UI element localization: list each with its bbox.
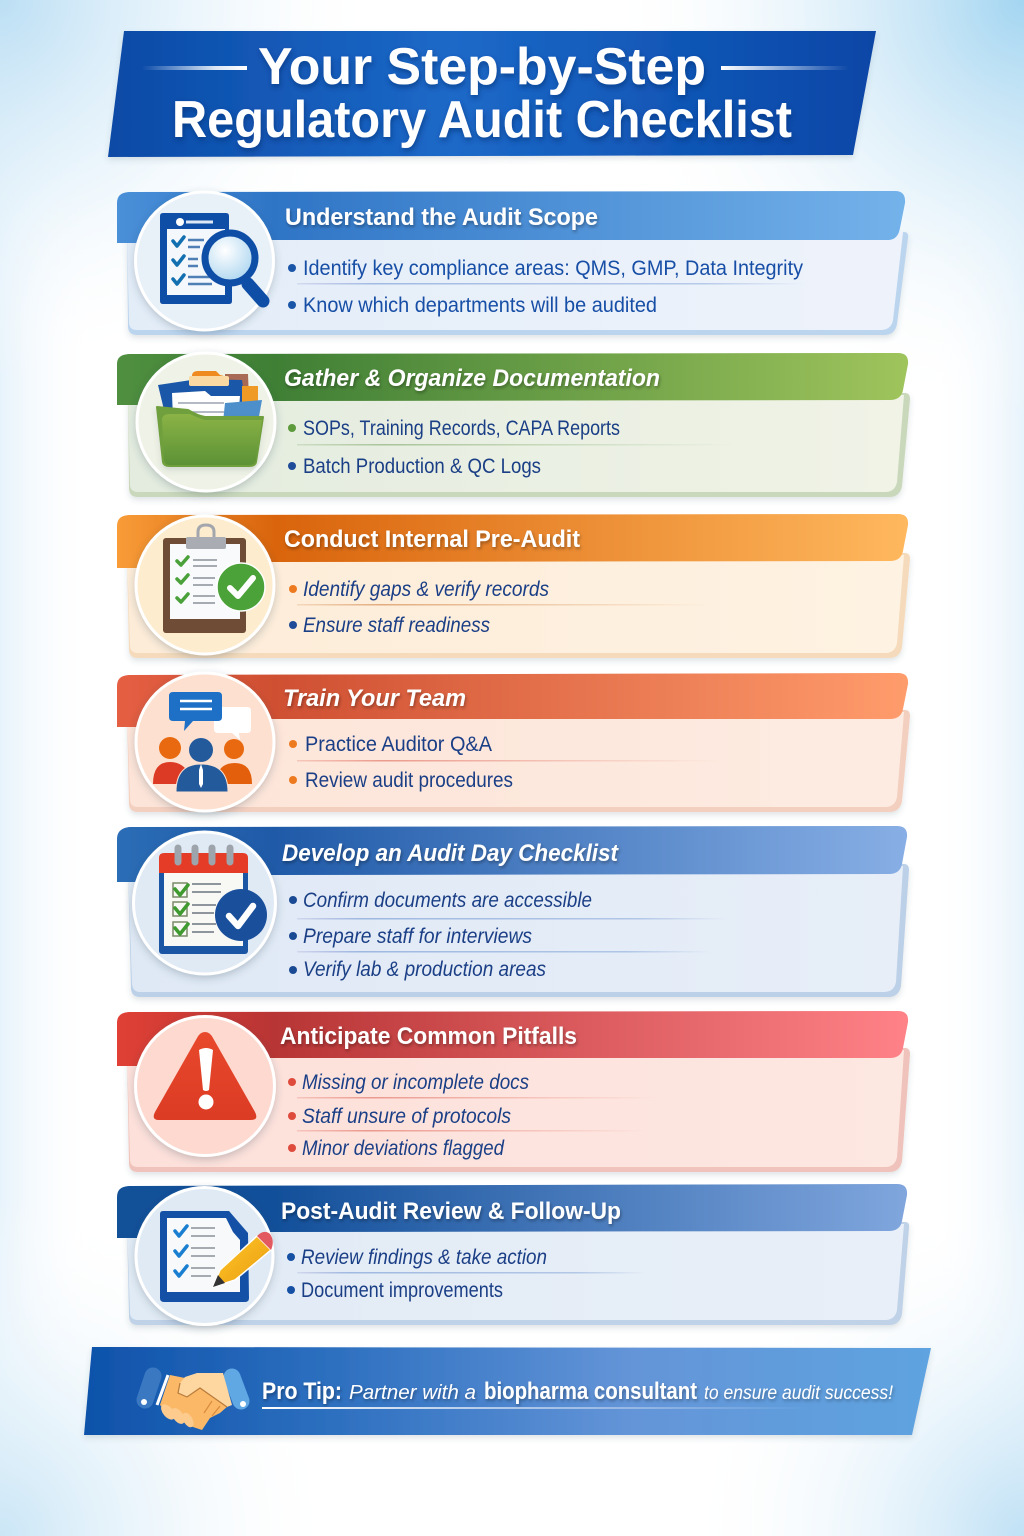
bullets <box>287 1246 645 1302</box>
title banner <box>108 31 876 157</box>
bullets: Ensure staff readiness <box>303 614 490 637</box>
bullets <box>289 889 725 981</box>
bullets <box>288 257 805 317</box>
title text: Regulatory Audit Checklist <box>172 91 792 149</box>
icon: team with speech bubbles <box>136 673 274 811</box>
bullets: Verify lab & production areas <box>303 958 546 981</box>
icon: checklist and magnifier <box>136 192 274 330</box>
bullets: Confirm documents are accessible <box>303 889 592 912</box>
heading: Post-Audit Review & Follow-Up <box>281 1198 621 1225</box>
icon: document and pencil <box>136 1188 273 1324</box>
bullets: Document improvements <box>301 1279 503 1302</box>
bullets: Batch Production & QC Logs <box>303 455 541 478</box>
panel: train your team <box>117 673 910 812</box>
bullets <box>288 417 735 478</box>
panel: understand the audit scope <box>117 191 908 335</box>
pro tip text: Partner with a <box>349 1382 476 1404</box>
heading: Develop an Audit Day Checklist <box>282 840 619 867</box>
pro tip text: Pro Tip: <box>262 1378 342 1405</box>
heading: Understand the Audit Scope <box>285 204 598 231</box>
bullets: Identify gaps & verify records <box>303 578 549 601</box>
title text <box>172 38 792 149</box>
bullets: Staff unsure of protocols <box>302 1105 511 1128</box>
pro tip text <box>262 1378 894 1405</box>
header bar <box>117 1011 908 1066</box>
pro tip text: to ensure audit success! <box>704 1383 894 1404</box>
bullets: SOPs, Training Records, CAPA Reports <box>303 417 620 440</box>
header bar <box>117 673 908 727</box>
icon: calendar checklist <box>134 832 276 974</box>
bullets: Missing or incomplete docs <box>302 1071 529 1094</box>
icon: warning triangle <box>136 1016 274 1156</box>
panel: conduct internal pre-audit <box>117 514 910 658</box>
header bar <box>117 353 908 405</box>
panel: develop an audit day checklist <box>117 826 909 997</box>
bullets: Review audit procedures <box>305 769 513 792</box>
bullets: Prepare staff for interviews <box>303 925 532 948</box>
bullets: Review findings & take action <box>301 1246 547 1269</box>
panel: pro tip <box>84 1347 931 1435</box>
heading: Gather & Organize Documentation <box>284 365 660 392</box>
panel: gather and organize documentation <box>117 353 910 497</box>
heading: Conduct Internal Pre-Audit <box>284 526 580 553</box>
header bar <box>117 1184 907 1238</box>
header bar <box>117 191 905 243</box>
pro tip text: biopharma consultant <box>484 1378 697 1405</box>
header bar <box>117 514 908 568</box>
title text: Your Step-by-Step <box>258 38 706 96</box>
bullets: Identify key compliance areas: QMS, GMP, Data Integrity <box>303 257 803 280</box>
panel: anticipate common pitfalls <box>117 1011 910 1172</box>
heading: Train Your Team <box>283 685 466 712</box>
panel: post-audit review and follow-up <box>117 1184 909 1325</box>
heading: Anticipate Common Pitfalls <box>280 1023 577 1050</box>
icon: folder of documents <box>137 353 275 491</box>
icon: clipboard with check badge <box>136 516 274 654</box>
header bar <box>117 826 907 882</box>
bullets: Know which departments will be audited <box>303 294 657 317</box>
bullets <box>288 1071 660 1160</box>
icon: handshake <box>141 1373 246 1430</box>
bullets <box>289 578 715 637</box>
bullets <box>289 733 720 792</box>
bullets: Practice Auditor Q&A <box>305 733 492 756</box>
bullets: Minor deviations flagged <box>302 1137 505 1160</box>
